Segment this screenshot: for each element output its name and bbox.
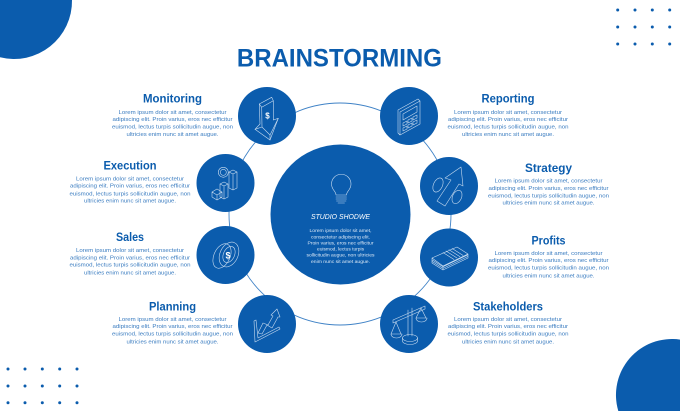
- text: Profits: Profits: [532, 234, 566, 248]
- text: Profits: adipiscing elit. Proin varius, eros nec efficitur: [488, 258, 609, 264]
- hub text: euismod, lectus turpis: [317, 246, 365, 252]
- text: Profits: [488, 234, 609, 279]
- text: Monitoring: euismod, lectus turpis sollicitudin augue, non: [112, 124, 233, 130]
- icon: light bulb: [332, 174, 351, 203]
- text: Strategy: ultricies enim nunc sit amet augue.: [502, 201, 594, 207]
- text: Planning: Planning: [149, 300, 196, 314]
- text: Strategy: Lorem ipsum dolor sit amet, consectetur: [494, 178, 603, 184]
- corner shape: bottom right: [616, 339, 680, 411]
- text: Stakeholders: ultricies enim nunc sit amet augue.: [462, 339, 554, 345]
- text: Planning: euismod, lectus turpis sollicitudin augue, non: [112, 332, 233, 338]
- text: Execution: euismod, lectus turpis sollicitudin augue, non: [70, 191, 190, 197]
- text: Planning: [112, 300, 233, 345]
- text: Sales: ultricies enim nunc sit amet augue.: [84, 270, 176, 276]
- text: Monitoring: Monitoring: [143, 92, 202, 106]
- text: Reporting: [448, 92, 568, 138]
- hub text: consectetur adipiscing elit.: [311, 235, 370, 241]
- connecting ring: [229, 103, 451, 325]
- dot grid: top right: [616, 8, 671, 46]
- text: Monitoring: Lorem ipsum dolor sit amet, consectetur: [118, 110, 227, 116]
- panel: central hub: [270, 144, 410, 284]
- text: Execution: [70, 158, 190, 205]
- hub text: enim nunc sit amet augue.: [311, 259, 370, 265]
- hub text: [306, 228, 375, 265]
- corner shape: top left: [0, 0, 72, 59]
- text: Monitoring: adipiscing elit. Proin varius, eros nec efficitur: [112, 117, 233, 123]
- text: Stakeholders: euismod, lectus turpis sollicitudin augue, non: [448, 332, 568, 338]
- text: Strategy: [488, 161, 609, 207]
- text: Stakeholders: Stakeholders: [473, 300, 543, 314]
- node: Reporting: [380, 87, 438, 145]
- text: Planning: adipiscing elit. Proin varius, eros nec efficitur: [112, 324, 233, 330]
- text: Execution: Execution: [104, 158, 156, 172]
- icon: balance scale: [391, 306, 427, 344]
- text: Reporting: euismod, lectus turpis sollicitudin augue, non: [448, 124, 568, 130]
- icon: falling arrow with dollar: $: [265, 112, 270, 120]
- title: BRAINSTORMING: [237, 45, 442, 73]
- text: Planning: ultricies enim nunc sit amet augue.: [126, 339, 218, 345]
- icon: chart with rising arrow: [254, 309, 280, 342]
- node: Sales: [196, 226, 254, 284]
- text: Reporting: adipiscing elit. Proin varius, eros nec efficitur: [448, 117, 568, 123]
- text: Reporting: ultricies enim nunc sit amet augue.: [462, 132, 554, 138]
- hub text: sollicitudin augue, non ultricies: [306, 253, 375, 259]
- text: Strategy: adipiscing elit. Proin varius, eros nec efficitur: [488, 186, 609, 192]
- text: Stakeholders: [448, 300, 568, 345]
- node: Planning: [238, 295, 296, 353]
- text: Sales: euismod, lectus turpis sollicitudin augue, non: [70, 263, 190, 269]
- text: Profits: Lorem ipsum dolor sit amet, consectetur: [494, 251, 603, 257]
- node: Strategy: [420, 157, 478, 215]
- text: Reporting: Reporting: [482, 92, 534, 106]
- icon: percent arrow: [431, 167, 464, 206]
- node: Execution: [196, 154, 254, 212]
- text: Profits: ultricies enim nunc sit amet augue.: [502, 273, 594, 279]
- text: Sales: Sales: [116, 230, 144, 244]
- text: Sales: adipiscing elit. Proin varius, eros nec efficitur: [70, 255, 190, 261]
- text: Strategy: euismod, lectus turpis sollicitudin augue, non: [488, 194, 609, 200]
- text: Sales: [70, 230, 190, 276]
- icon: calculator: [398, 99, 420, 135]
- node: Monitoring: [238, 87, 296, 145]
- text: Monitoring: ultricies enim nunc sit amet augue.: [126, 132, 218, 138]
- icon: isometric bars with coin: [212, 167, 237, 200]
- text: Reporting: Lorem ipsum dolor sit amet, consectetur: [454, 110, 562, 116]
- node: Stakeholders: [380, 295, 438, 353]
- text: Monitoring: [112, 92, 233, 138]
- hub text: Lorem ipsum dolor sit amet,: [310, 228, 372, 234]
- text: Sales: Lorem ipsum dolor sit amet, consectetur: [76, 248, 184, 254]
- text: Execution: Lorem ipsum dolor sit amet, consectetur: [76, 177, 184, 183]
- hub heading: STUDIO SHODWE: [311, 212, 371, 221]
- text: Stakeholders: Lorem ipsum dolor sit amet, consectetur: [454, 317, 562, 323]
- icon: stack of banknotes: [432, 247, 468, 270]
- text: Execution: adipiscing elit. Proin varius, eros nec efficitur: [70, 184, 190, 190]
- dot grid: bottom left: [6, 368, 78, 404]
- text: Execution: ultricies enim nunc sit amet augue.: [84, 199, 176, 205]
- icon: coin: $: [225, 250, 231, 260]
- node: Profits: [420, 228, 478, 286]
- text: Planning: Lorem ipsum dolor sit amet, consectetur: [118, 317, 227, 323]
- hub text: Proin varius, eros nec efficitur: [308, 241, 374, 247]
- text: Strategy: Strategy: [525, 161, 572, 175]
- text: Profits: euismod, lectus turpis sollicitudin augue, non: [488, 266, 609, 272]
- text: Stakeholders: adipiscing elit. Proin varius, eros nec efficitur: [448, 324, 568, 330]
